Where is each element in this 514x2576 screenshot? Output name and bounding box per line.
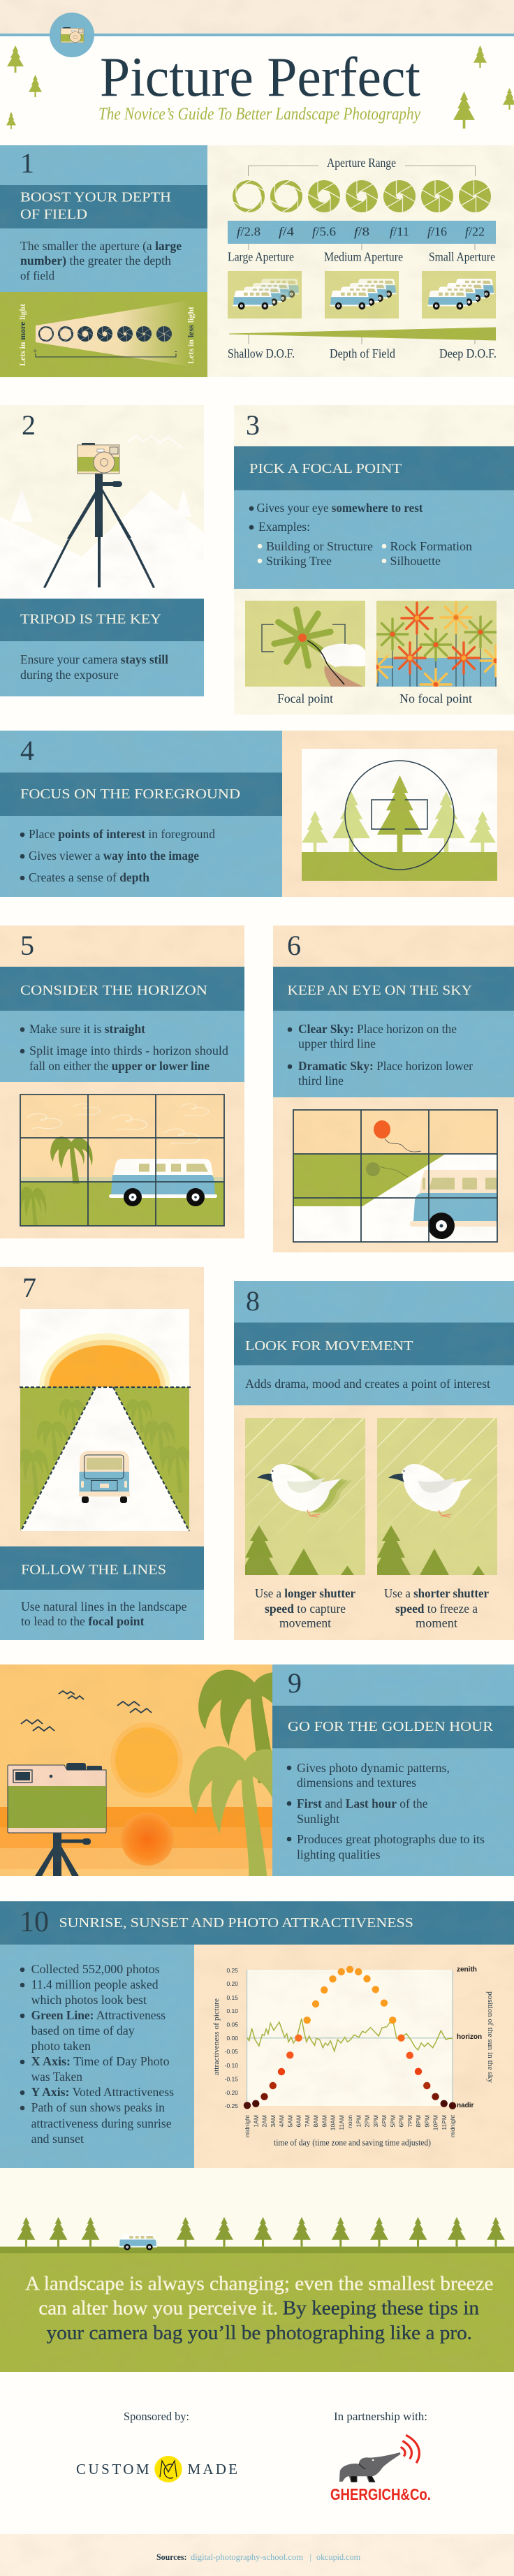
illustration: foreground tree in focus: [282, 731, 514, 897]
closing message: [25, 2273, 493, 2344]
bullet list: Clear Sky: Place horizon on the: [298, 1022, 457, 1036]
heading: 10: [20, 1906, 49, 1938]
y axis ticks: 0.00: [226, 2035, 238, 2042]
chart: sun path vs attractiveness: [194, 1945, 514, 2168]
caption: shorter shutter: speed to freeze a: [395, 1602, 478, 1616]
partner: ghergich and co: GHERGICH&Co.: [330, 2485, 431, 2503]
bullet list: dimensions and textures: [297, 1776, 416, 1790]
closing message: By keeping these tips in: [283, 2297, 480, 2320]
bullet list: [287, 1761, 485, 1861]
icon: van rear view: [79, 1451, 130, 1503]
partner: ghergich and co: In partnership with:: [334, 2410, 427, 2423]
icon: camera and tripod: [8, 1763, 106, 1876]
icon: camera on tripod: [43, 443, 155, 588]
title: Picture Perfect: [100, 47, 420, 108]
aperture labels: [228, 250, 495, 264]
heading: [273, 967, 514, 1011]
depth of field labels: Depth of Field: [330, 346, 395, 360]
panel 9: go for the golden hour: [0, 1664, 514, 1876]
y axis ticks: -0.20: [225, 2089, 238, 2096]
illustration: low horizon with balloon: [293, 1110, 499, 1242]
f-stop scale: f/16: [427, 225, 447, 239]
caption: longer shutter: speed to capture: [265, 1602, 346, 1616]
bullet list: [234, 490, 514, 589]
caption: shorter shutter: Use a shorter shutter: [384, 1586, 489, 1600]
y axis ticks: -0.25: [225, 2102, 238, 2109]
heading: [272, 1706, 514, 1748]
bullet list: was Taken: [31, 2070, 82, 2084]
bullet list: Green Line: Attractiveness: [31, 2008, 166, 2022]
bullet list: Make sure it is straight: [29, 1022, 145, 1036]
f-stop scale: f/11: [390, 225, 409, 239]
depth of field labels: [228, 346, 497, 360]
heading: SUNRISE, SUNSET AND PHOTO ATTRACTIVENESS: [59, 1915, 413, 1931]
x axis ticks: 10AM: [330, 2115, 337, 2130]
van depth comparison: [228, 271, 496, 319]
icon: elephant with sound waves: [339, 2435, 419, 2482]
bullet list: based on time of day: [31, 2024, 135, 2037]
panel 7: follow the lines: [0, 1267, 204, 1640]
heading: OF FIELD: [20, 207, 87, 222]
closing message: A landscape is always changing; even the smallest breeze: [25, 2273, 493, 2295]
y axis ticks: [225, 1967, 238, 2109]
bullet list: Path of sun shows peaks in: [31, 2100, 165, 2114]
bullet list: which photos look best: [31, 1993, 147, 2007]
bullet list: [0, 1945, 194, 2168]
heading: [234, 446, 514, 490]
sun position labels: nadir: [457, 2102, 474, 2109]
x axis ticks: 1PM: [355, 2115, 362, 2127]
x axis ticks: 2PM: [363, 2115, 370, 2127]
bullet list: and sunset: [31, 2132, 84, 2146]
depth of field wedge: [229, 327, 496, 341]
number 6: 6: [287, 930, 301, 961]
partner: ghergich and co: [330, 2410, 431, 2503]
bullet list: Place points of interest in foreground: [29, 827, 215, 841]
x axis ticks: midnight: [449, 2114, 456, 2137]
caption: shorter shutter: moment: [416, 1616, 457, 1630]
heading: [0, 1546, 204, 1590]
bullet list: fall on either the upper or lower line: [29, 1059, 210, 1073]
bullet list: Gives viewer a way into the image: [29, 849, 199, 863]
panel 1: boost your depth of field: [0, 145, 514, 377]
sun path dots: [244, 1966, 456, 2109]
subtitle: The Novice’s Guide To Better Landscape Photography: [98, 105, 421, 124]
aperture range bracket: [249, 156, 475, 176]
bullet list: third line: [298, 1074, 344, 1088]
illustration: rule of thirds with van: [20, 1095, 224, 1231]
x axis ticks: 10PM: [432, 2115, 439, 2130]
number 3: 3: [246, 409, 260, 441]
x axis ticks: 9PM: [423, 2115, 430, 2127]
body text: to lead to the focal point: [21, 1614, 144, 1628]
heading: [0, 599, 204, 641]
bullet list: Sunlight: [297, 1812, 339, 1826]
sun position labels: zenith: [457, 1966, 477, 1974]
number 2: 2: [22, 409, 36, 441]
heading: [234, 1323, 514, 1365]
x axis ticks: 7PM: [406, 2115, 413, 2127]
heading: KEEP AN EYE ON THE SKY: [288, 983, 472, 998]
body text: Adds drama, mood and creates a point of interest: [245, 1377, 490, 1391]
heading: BOOST YOUR DEPTH: [20, 190, 171, 205]
sources footer: [0, 2534, 514, 2576]
captions: Focal point: [277, 691, 333, 705]
sources footer: okcupid.com: [316, 2552, 360, 2562]
heading: TRIPOD IS THE KEY: [20, 612, 161, 627]
y axis ticks: -0.05: [225, 2048, 238, 2055]
x axis ticks: 3PM: [372, 2115, 379, 2127]
axis titles: [213, 1991, 494, 2148]
y axis ticks: -0.15: [225, 2076, 238, 2083]
tree row: [17, 2217, 505, 2246]
f-stop scale: f/4: [279, 225, 294, 239]
x axis ticks: 9AM: [321, 2115, 328, 2127]
x axis ticks: 7AM: [304, 2115, 311, 2127]
caption: longer shutter: Use a longer shutter: [255, 1586, 355, 1600]
y axis ticks: 0.20: [226, 1980, 238, 1987]
x axis ticks: 11PM: [441, 2115, 448, 2130]
illustration: no focal point flowers: [376, 601, 497, 687]
x axis ticks: 4PM: [381, 2115, 388, 2127]
icon: camera badge: [50, 13, 94, 57]
aperture range bracket: Aperture Range: [327, 156, 396, 170]
bullet list: Gives photo dynamic patterns,: [297, 1761, 450, 1775]
x axis ticks: 8PM: [415, 2115, 422, 2127]
bullet list: Produces great photographs due to its: [297, 1832, 485, 1846]
panel 10: sunrise, sunset and photo attractiveness: [0, 1901, 514, 2168]
x axis ticks: 8AM: [312, 2115, 319, 2127]
x axis ticks: 1AM: [252, 2115, 259, 2127]
light diagram: [0, 292, 207, 377]
axis titles: time of day (time zone and saving time adjusted): [274, 2137, 431, 2148]
sources footer: |: [310, 2552, 311, 2562]
x axis ticks: 5AM: [286, 2115, 293, 2127]
bullet list: upper third line: [298, 1037, 376, 1051]
x axis ticks: [244, 2114, 456, 2137]
decorative pine trees: [6, 45, 514, 129]
x axis ticks: midnight: [244, 2114, 251, 2137]
body text: [0, 1590, 204, 1640]
x axis ticks: 11AM: [338, 2115, 345, 2130]
bullet list: 11.4 million people asked: [31, 1977, 159, 1991]
sources footer: Sources:: [156, 2552, 187, 2562]
number 4: 4: [20, 735, 34, 766]
light diagram: Lets in more light: [17, 304, 27, 366]
icon: monogram: [154, 2456, 182, 2482]
light diagram: Lets in less light: [186, 307, 196, 364]
light diagram: +: [33, 347, 37, 356]
bullet list: First and Last hour of the: [297, 1796, 428, 1810]
green attractiveness line: [247, 2019, 453, 2051]
bullet list: Collected 552,000 photos: [31, 1962, 160, 1976]
aperture labels: Large Aperture: [228, 250, 294, 264]
axis titles: attractiveness of picture: [213, 1998, 221, 2075]
x axis ticks: 3AM: [270, 2115, 277, 2127]
bullet list: Creates a sense of depth: [29, 870, 149, 884]
bullet list: [0, 1011, 244, 1082]
body text: [0, 641, 204, 696]
heading: FOLLOW THE LINES: [21, 1562, 166, 1577]
panel 4: focus on the foreground: [0, 731, 514, 897]
illustration: bird with long shutter: [245, 1418, 365, 1575]
panel 5: consider the horizon: [0, 925, 244, 1238]
bullet list: Silhouette: [390, 554, 441, 568]
heading: FOCUS ON THE FOREGROUND: [20, 786, 240, 802]
body text: Use natural lines in the landscape: [21, 1600, 187, 1613]
captions: No focal point: [399, 691, 472, 705]
heading: [0, 1901, 514, 1945]
y axis ticks: 0.10: [226, 2007, 238, 2014]
aperture labels: Small Aperture: [429, 250, 495, 264]
heading: [0, 185, 207, 228]
sponsor: custom made: [76, 2410, 237, 2482]
heading: [0, 967, 244, 1011]
f-stop scale: f/5.6: [312, 225, 336, 239]
bullet list: Examples:: [258, 520, 310, 534]
f-stop scale: [228, 221, 496, 344]
y axis ticks: -0.10: [225, 2062, 238, 2069]
y axis ticks: 0.15: [226, 1994, 238, 2001]
f-stop scale: f/22: [465, 225, 485, 239]
heading: PICK A FOCAL POINT: [249, 461, 402, 476]
caption: longer shutter: movement: [279, 1616, 331, 1630]
y axis ticks: 0.05: [226, 2021, 238, 2028]
x axis ticks: 6PM: [398, 2115, 405, 2127]
number 1: 1: [20, 147, 34, 179]
bullet list: Striking Tree: [266, 554, 332, 568]
body text: number) the greater the depth: [20, 254, 171, 268]
body text: [20, 239, 182, 282]
bullet list: photo taken: [31, 2039, 91, 2053]
x axis ticks: 2AM: [261, 2115, 268, 2127]
number 8: 8: [246, 1285, 260, 1317]
bullet list: Building or Structure: [266, 539, 373, 553]
aperture labels: Medium Aperture: [324, 250, 403, 264]
bullet list: lighting qualities: [297, 1847, 380, 1861]
header: [0, 0, 514, 129]
heading: CONSIDER THE HORIZON: [20, 983, 207, 998]
panel 6: keep an eye on the sky: [273, 925, 514, 1252]
bullet list: X Axis: Time of Day Photo: [31, 2054, 170, 2068]
sponsor: custom made: CUSTOM: [76, 2461, 149, 2478]
sun position labels: [457, 1966, 482, 2109]
panel 2: tripod is the key: [0, 405, 204, 696]
closing message: your camera bag you’ll be photographing like a pro.: [47, 2322, 472, 2344]
bullet list: Dramatic Sky: Place horizon lower: [298, 1059, 473, 1073]
depth of field labels: Shallow D.O.F.: [228, 346, 295, 360]
body text: Ensure your camera stays still: [20, 652, 168, 666]
captions: [277, 691, 472, 705]
aperture icons: [233, 180, 491, 212]
x axis ticks: 6AM: [295, 2115, 302, 2127]
illustration: road to sunset: [17, 1309, 193, 1531]
heading: LOOK FOR MOVEMENT: [245, 1338, 413, 1354]
closing message: can alter how you perceive it.: [38, 2297, 278, 2320]
axis titles: position of the sun in the sky: [486, 1991, 494, 2084]
heading: GO FOR THE GOLDEN HOUR: [288, 1719, 494, 1734]
depth of field labels: Deep D.O.F.: [439, 346, 497, 360]
f-stop scale: f/8: [354, 225, 369, 239]
icon: van on road: [119, 2234, 157, 2251]
caption: longer shutter: [255, 1586, 355, 1630]
closing landscape band: [0, 2168, 514, 2372]
body text: The smaller the aperture (a large: [20, 239, 182, 254]
illustration: focal point flower: [245, 601, 367, 688]
caption: shorter shutter: [384, 1586, 489, 1630]
bullet list: Y Axis: Voted Attractiveness: [31, 2085, 174, 2099]
y axis ticks: 0.25: [226, 1967, 238, 1974]
number 5: 5: [20, 930, 34, 961]
bullet list: Gives your eye somewhere to rest: [257, 501, 423, 515]
x axis ticks: noon: [346, 2115, 353, 2128]
body text: of field: [20, 268, 54, 282]
illustration: bird with short shutter: [377, 1418, 497, 1575]
sun position labels: horizon: [457, 2033, 482, 2041]
panel 3: pick a focal point: [234, 405, 514, 715]
sources footer: digital-photography-school.com: [191, 2552, 303, 2562]
panel 8: look for movement: [234, 1281, 514, 1640]
number 7: 7: [22, 1272, 36, 1303]
bullet list: Split image into thirds - horizon should: [29, 1044, 228, 1058]
x axis ticks: 4AM: [278, 2115, 285, 2127]
bullet list: [273, 1011, 514, 1097]
sponsor: custom made: Sponsored by:: [124, 2410, 189, 2423]
heading: [0, 773, 282, 816]
bullet list: attractiveness during sunrise: [31, 2116, 172, 2130]
illustration: sunset scene with camera: [0, 1664, 272, 1876]
x axis ticks: 5PM: [389, 2115, 396, 2127]
number 9: 9: [288, 1667, 302, 1699]
light diagram: -: [175, 347, 177, 356]
sponsor: custom made: MADE: [187, 2461, 237, 2478]
bullet list: [20, 827, 215, 884]
f-stop scale: f/2.8: [237, 225, 260, 239]
body text: during the exposure: [20, 668, 119, 682]
bullet list: Rock Formation: [390, 539, 472, 553]
